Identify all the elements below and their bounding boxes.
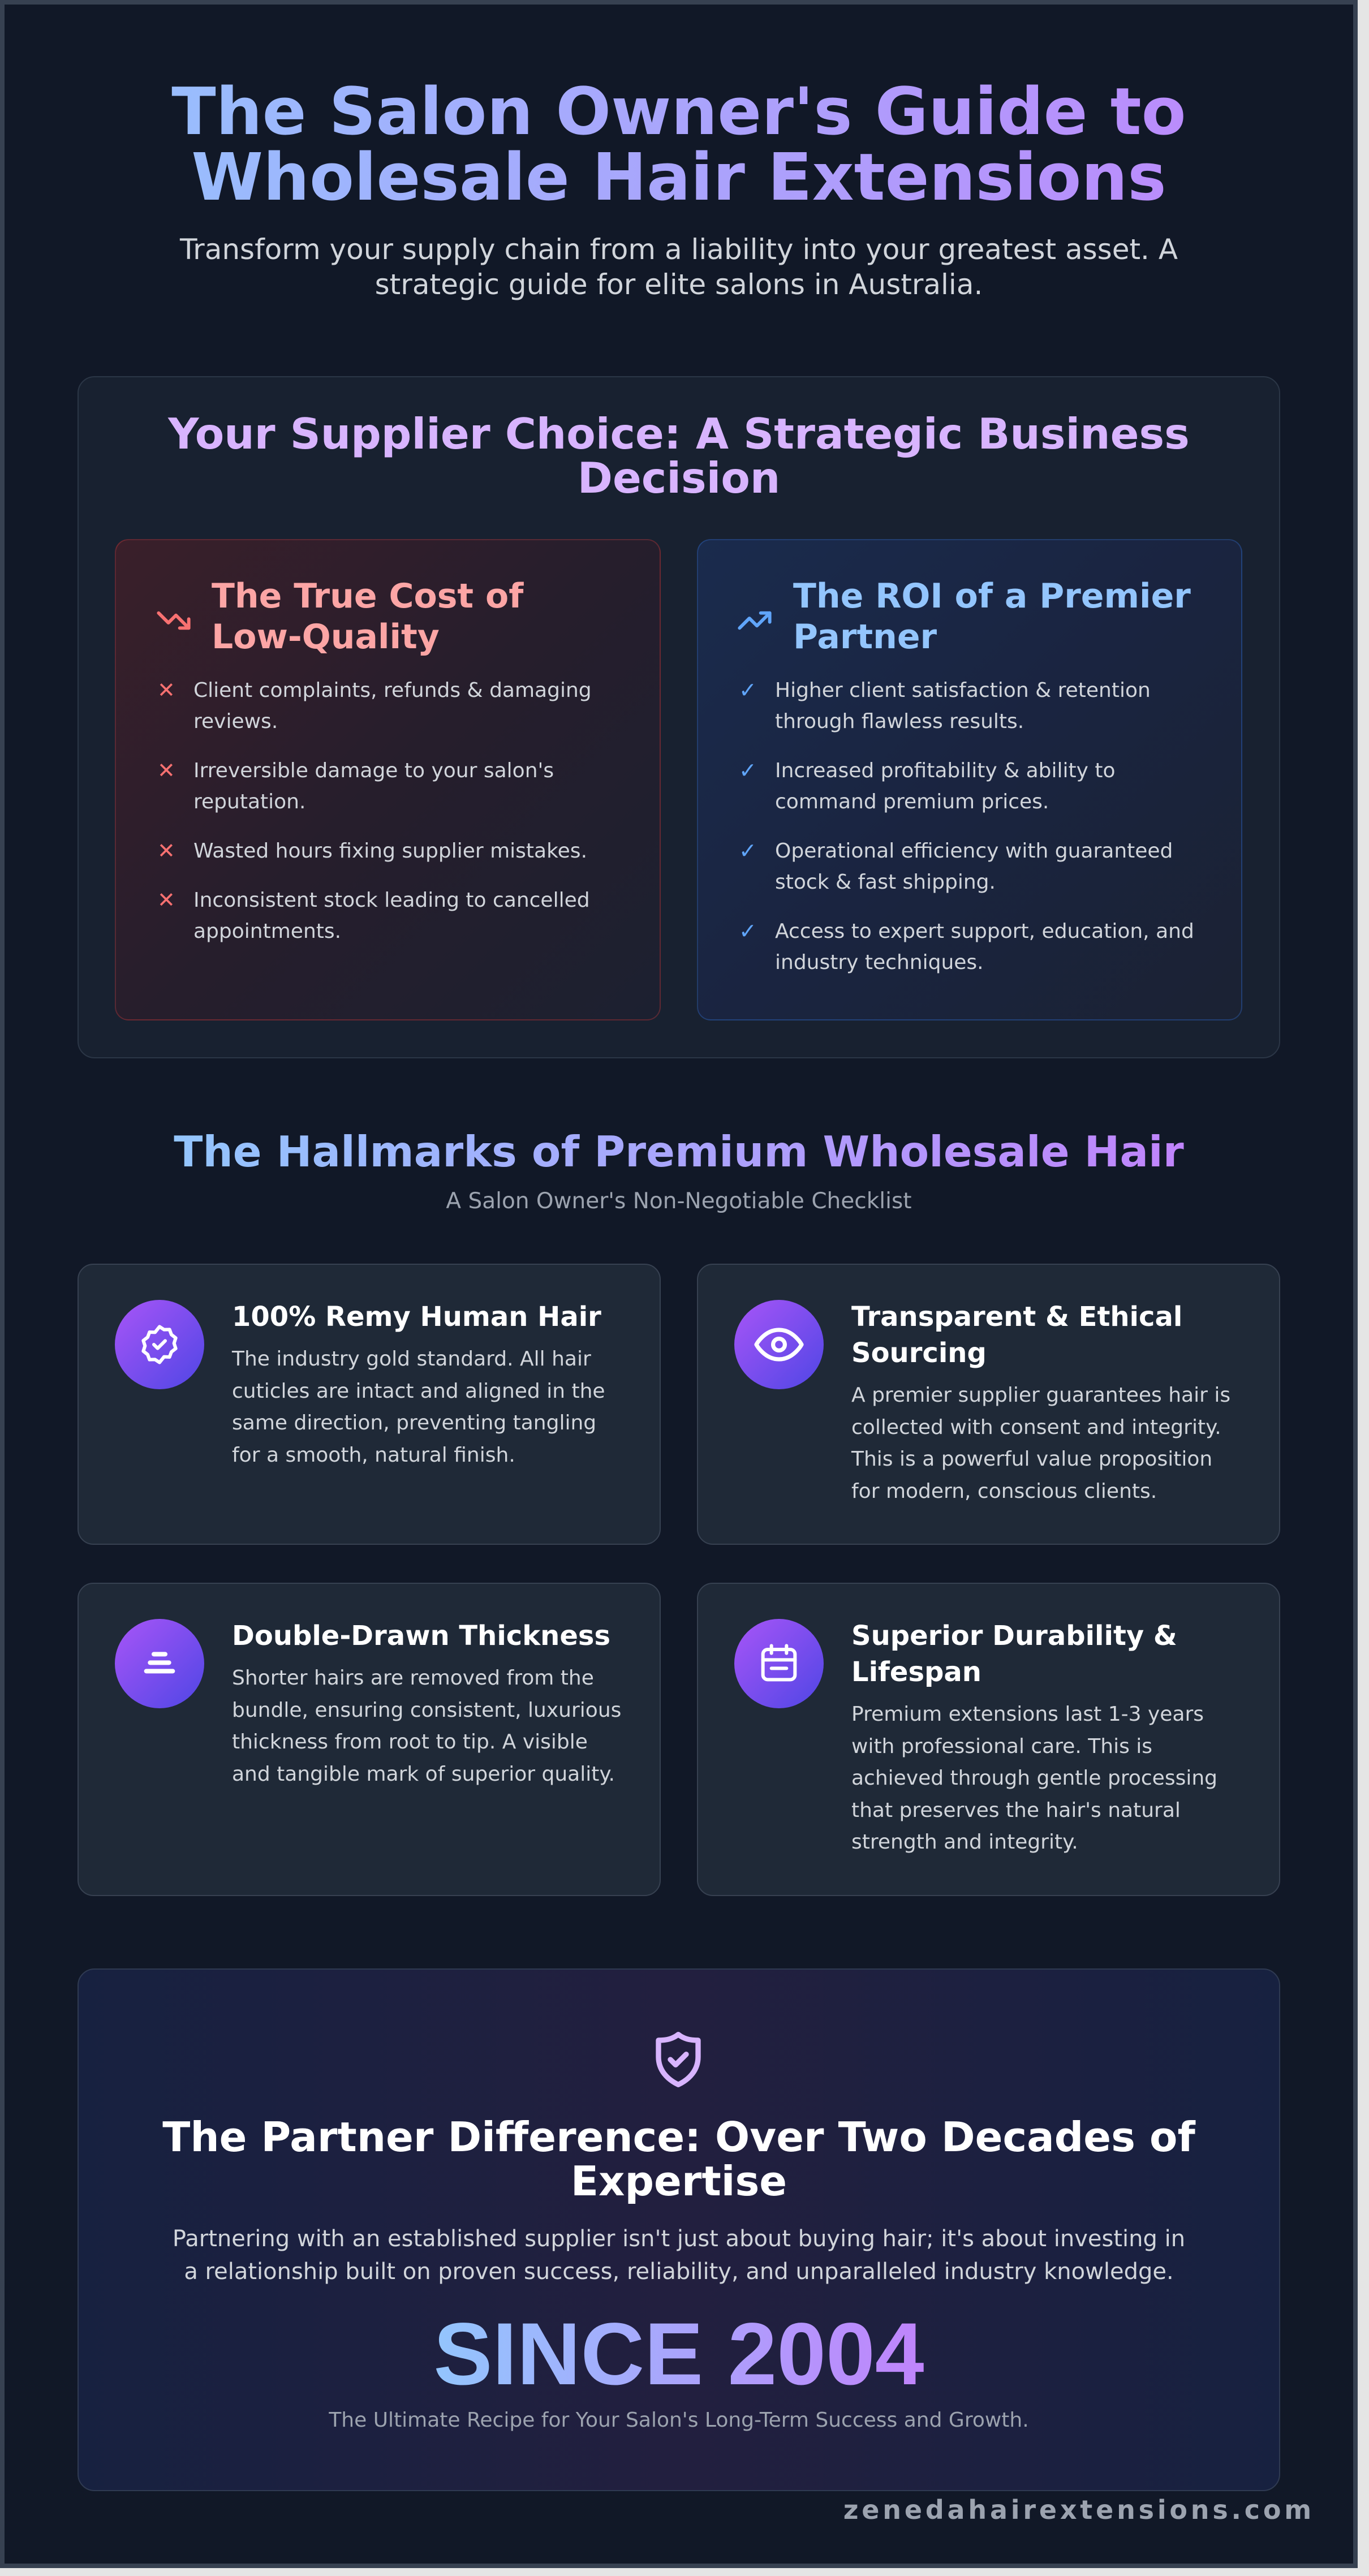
list: costs: appointments. [193, 920, 341, 943]
text: strength and integrity. [851, 1830, 1078, 1854]
list: ROI: Higher client satisfaction & retention [775, 679, 1151, 702]
list: ROI: stock & fast shipping. [775, 871, 996, 894]
list: costs: ✕ [157, 758, 175, 783]
icon: trending up [738, 611, 772, 630]
text: thickness from root to tip. A visible [232, 1730, 588, 1754]
list: ROI: Access to expert support, education, and [775, 920, 1194, 943]
list: ROI: Operational efficiency with guaranteed [775, 839, 1173, 863]
paragraph: a relationship built on proven success, reliability, and unparalleled industry knowledge. [184, 2259, 1174, 2285]
icon: badge check [115, 1300, 204, 1389]
text: Sourcing [851, 1337, 987, 1369]
text [232, 1620, 621, 1785]
text: for modern, conscious clients. [851, 1480, 1157, 1502]
card: remy [78, 1264, 661, 1545]
heading: The ROI of a Premier [793, 576, 1191, 616]
list: ROI: industry techniques. [775, 951, 984, 974]
text: with professional care. This is [851, 1734, 1152, 1758]
big stat: SINCE 2004 [433, 2305, 924, 2403]
text: and tangible mark of superior quality. [232, 1763, 615, 1785]
heading [162, 2113, 1196, 2205]
text: Lifespan [851, 1656, 981, 1688]
text: 100% Remy Human Hair [232, 1301, 601, 1333]
icon: calendar [734, 1619, 824, 1708]
heading [793, 576, 1191, 657]
text: The industry gold standard. All hair [232, 1347, 591, 1371]
heading: Partner [793, 617, 937, 657]
panel: partner difference [78, 1968, 1280, 2491]
panel heading: Decision [578, 453, 780, 503]
section subtitle: A Salon Owner's Non-Negotiable Checklist [446, 1188, 912, 1214]
text: cuticles are intact and aligned in the [232, 1379, 605, 1403]
text [851, 1301, 1230, 1502]
text: This is a powerful value proposition [851, 1448, 1212, 1471]
text: collected with consent and integrity. [851, 1415, 1221, 1439]
list: ROI: ✓ [739, 758, 757, 783]
heading: The Partner Difference: Over Two Decades of [162, 2113, 1195, 2161]
text: Premium extensions last 1-3 years [851, 1703, 1204, 1726]
text: Transparent & Ethical [851, 1301, 1182, 1333]
list: ROI: ✓ [739, 838, 757, 863]
list: costs [157, 678, 592, 943]
website footer: zenedahairextensions.com [843, 2495, 1315, 2525]
text: same direction, preventing tangling [232, 1411, 596, 1435]
subtitle: strategic guide for elite salons in Australia. [375, 268, 983, 301]
list: ROI: Increased profitability & ability to [775, 759, 1116, 782]
list: costs: ✕ [157, 838, 175, 863]
list: costs: Client complaints, refunds & damaging [193, 679, 592, 702]
panel heading [167, 409, 1190, 503]
title: Wholesale Hair Extensions [191, 140, 1166, 216]
heading: Expertise [571, 2157, 787, 2205]
card: ROI [697, 539, 1242, 1020]
subtitle: Transform your supply chain from a liability into your greatest asset. A [180, 233, 1178, 266]
text: achieved through gentle processing [851, 1767, 1217, 1790]
paragraph: Partnering with an established supplier isn't just about buying hair; it's about investing in [173, 2226, 1185, 2252]
panel: supplier choice [78, 376, 1280, 1058]
list: costs: Irreversible damage to your salon's [193, 759, 554, 782]
text: Double-Drawn Thickness [232, 1620, 610, 1652]
icon: shield check [656, 2032, 701, 2087]
panel heading: Your Supplier Choice: A Strategic Business [168, 409, 1190, 459]
card: double drawn [78, 1583, 661, 1896]
list: ROI: command premium prices. [775, 790, 1049, 813]
list: costs: Inconsistent stock leading to cancelled [193, 889, 590, 912]
subtitle [180, 233, 1178, 301]
card: true cost [115, 539, 661, 1020]
list: costs: reviews. [193, 710, 278, 733]
text [232, 1301, 605, 1466]
list: ROI [739, 678, 1194, 974]
list: ROI: ✓ [739, 919, 757, 944]
icon: layers [115, 1619, 204, 1708]
list: ROI: ✓ [739, 678, 757, 703]
list: costs: ✕ [157, 888, 175, 912]
section heading: hallmarks: The Hallmarks of Premium Wholesale Hair [174, 1127, 1184, 1177]
title: The Salon Owner's Guide to [171, 74, 1186, 150]
title [0, 79, 1358, 210]
heading: Low-Quality [212, 617, 440, 657]
text: bundle, ensuring consistent, luxurious [232, 1698, 621, 1722]
card: sourcing [697, 1264, 1280, 1545]
paragraph [173, 2226, 1185, 2285]
list: ROI: through flawless results. [775, 710, 1024, 733]
list: costs: ✕ [157, 678, 175, 703]
icon: eye [734, 1300, 824, 1389]
icon: trending down [157, 611, 191, 630]
card: durability [697, 1583, 1280, 1896]
heading [212, 576, 524, 657]
heading: The True Cost of [212, 576, 523, 616]
text: Superior Durability & [851, 1620, 1177, 1652]
text [851, 1620, 1217, 1854]
tagline: The Ultimate Recipe for Your Salon's Long-Term Success and Growth. [329, 2409, 1029, 2432]
list: costs: reputation. [193, 790, 305, 813]
list: costs: Wasted hours fixing supplier mistakes. [193, 839, 587, 863]
text: that preserves the hair's natural [851, 1799, 1181, 1821]
text: Shorter hairs are removed from the [232, 1666, 594, 1690]
text: for a smooth, natural finish. [232, 1444, 515, 1466]
text: A premier supplier guarantees hair is [851, 1384, 1230, 1407]
